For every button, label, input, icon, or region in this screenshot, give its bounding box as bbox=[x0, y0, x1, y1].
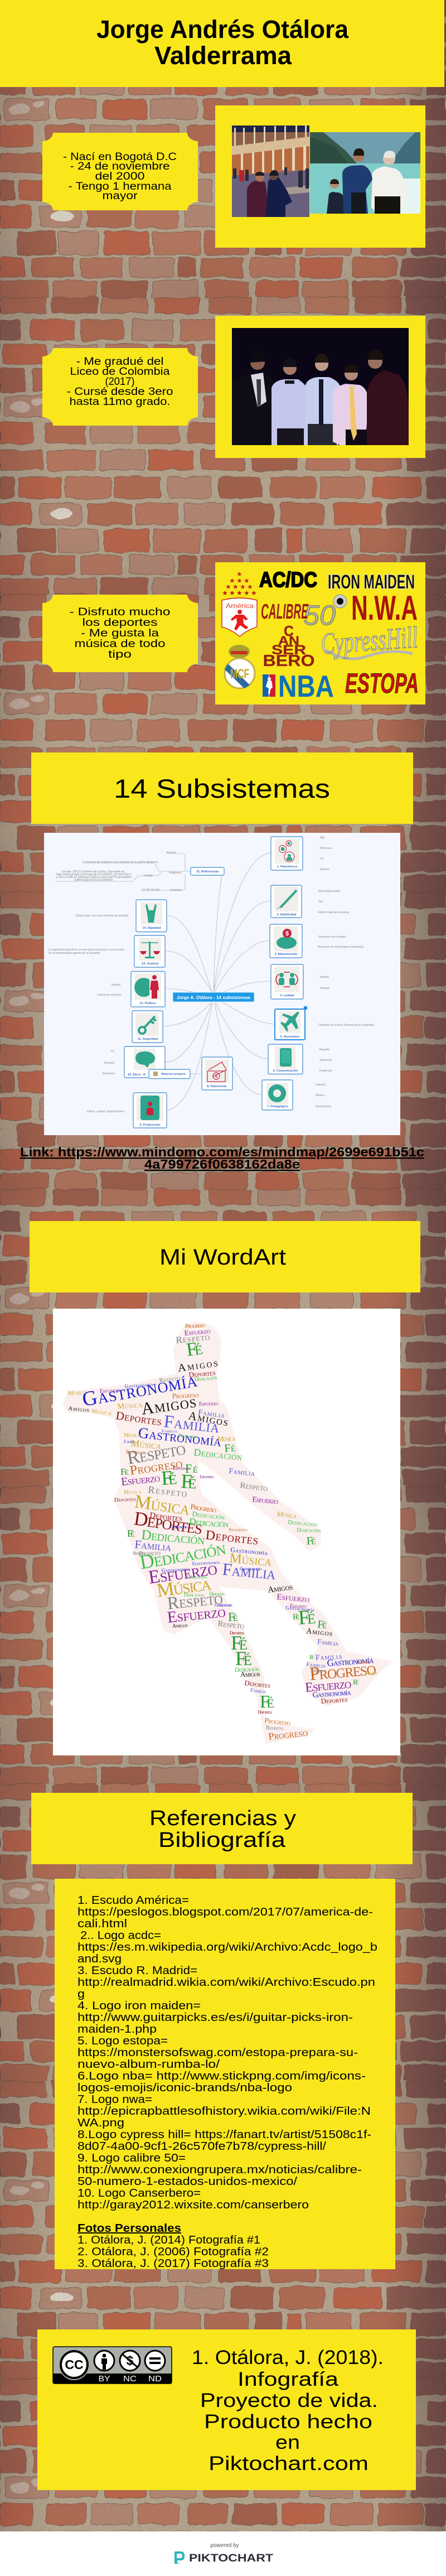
mind map leaf labels: Respeto bbox=[319, 1048, 330, 1051]
word art figure: Respeto bbox=[240, 1481, 268, 1493]
panel: references list: nuevo-album-rumba-lo/ bbox=[77, 2058, 220, 2071]
heading: 14 Subsistemas bbox=[31, 752, 413, 824]
mind map leaf labels bbox=[47, 836, 374, 1113]
word art figure: Gastronomía bbox=[170, 1525, 188, 1530]
icon: creative commons badge: ND bbox=[148, 2374, 162, 2384]
panel: references list: https://peslogos.blogspot.com/2017/07/america-de- bbox=[77, 1906, 373, 1918]
logo: América de Cali: ★ bbox=[236, 570, 243, 578]
panel: hobbies text bbox=[42, 595, 198, 672]
word art figure: Fé bbox=[120, 1467, 129, 1477]
panel: hobbies text: - Disfruto mucho bbox=[69, 606, 171, 618]
mind map leaf labels: Deporte bbox=[316, 1083, 326, 1087]
word art figure: Fé bbox=[224, 1441, 236, 1455]
icon: creative commons badge: CC bbox=[65, 2357, 84, 2372]
word art figure: Fé bbox=[235, 1647, 252, 1670]
node: 7 Pedagógico bbox=[262, 1080, 293, 1110]
word art figure: Música bbox=[229, 1551, 273, 1570]
panel: credits: Producto hecho bbox=[204, 2411, 372, 2433]
panel: references list bbox=[55, 1879, 395, 2270]
word art figure: Familia bbox=[221, 1559, 277, 1583]
word art figure: Dedicación bbox=[235, 1666, 259, 1673]
panel: school text bbox=[42, 348, 198, 426]
word art figure: Música bbox=[124, 1432, 140, 1439]
word art figure: Música bbox=[91, 1408, 112, 1417]
node: 8 Patrimonio: $ bbox=[215, 1074, 218, 1079]
panel: graduation photo bbox=[215, 316, 425, 458]
node: 14 Dignidad: 14. Dignidad bbox=[142, 927, 161, 930]
word art figure: Esfuerzo bbox=[166, 1603, 226, 1627]
node: 15 Referencias bbox=[191, 867, 224, 875]
mind map leaf labels: https://www.google.com/maps/@-34.6390281,-58.3633790,3 bbox=[56, 873, 132, 876]
mind map leaf labels: Google bbox=[144, 874, 153, 877]
mind map leaf labels: Tolerancia bbox=[319, 1059, 332, 1062]
logo: AC/DC: AC/DC bbox=[259, 568, 317, 592]
mind map link bbox=[20, 1145, 424, 1171]
panel: references list: and.svg bbox=[77, 1953, 122, 1965]
logo: Calibre 50: CALIBRE bbox=[261, 600, 309, 624]
word art figure: Esfuerzo bbox=[290, 1603, 307, 1609]
panel: school text: - Cursé desde 3ero bbox=[67, 386, 173, 398]
word art figure: Fé bbox=[228, 1610, 238, 1624]
word art figure: Música bbox=[133, 1491, 192, 1519]
word art figure: Fé bbox=[161, 1466, 177, 1489]
panel: references list: 5. Logo estopa= bbox=[77, 2035, 168, 2047]
word art figure: Familia bbox=[317, 1637, 339, 1647]
word art figure: Familia bbox=[306, 1661, 326, 1670]
word art figure: Gastronomía bbox=[80, 1368, 199, 1411]
word art figure: Progreso bbox=[268, 1727, 308, 1742]
node: 6 Comunicación bbox=[268, 1044, 303, 1074]
word art figure: Fé bbox=[353, 1678, 359, 1686]
node: 13 Justicia: 13. Justicia bbox=[142, 962, 159, 966]
mind map leaf labels: bv8BnIrQg!2e0!7i13312!8i6656 bbox=[74, 879, 113, 882]
icon: creative commons badge bbox=[53, 2347, 172, 2384]
word art figure: Progreso bbox=[264, 1716, 291, 1727]
word art figure: Fé bbox=[181, 1470, 197, 1493]
node: 2 Salubridad: 2. Salubridad bbox=[277, 913, 297, 916]
panel: references list: 3. Otálora, J. (2017) Fotografía #3 bbox=[77, 2257, 269, 2270]
panel: credits: en bbox=[275, 2432, 300, 2453]
word art figure: Esfuerzo bbox=[277, 1593, 310, 1604]
node: 2 Salubridad bbox=[271, 885, 302, 918]
word art figure: Deportes bbox=[115, 1408, 163, 1429]
panel: references list: 9. Logo calibre 50= bbox=[77, 2152, 186, 2164]
word art figure: Familia bbox=[134, 1537, 172, 1554]
footer: powered by Piktochart bbox=[174, 2542, 273, 2564]
footer: powered by Piktochart: PIKTOCHART bbox=[189, 2553, 273, 2564]
word art figure: Dedicación bbox=[178, 1432, 198, 1440]
panel: references list: WA.png bbox=[77, 2117, 124, 2129]
mind map leaf labels: La mayoría de imágenes son tomadas de la galería Mindomo. bbox=[82, 861, 159, 864]
panel: references list: Fotos Personales bbox=[77, 2222, 181, 2235]
logo: América de Cali: ★★★★★ bbox=[222, 589, 257, 597]
word art figure: Fé bbox=[317, 1618, 327, 1631]
mind map leaf labels: Neutral bbox=[112, 983, 120, 987]
word art figure: Deportes bbox=[230, 1630, 244, 1636]
node: 5 Recreativo: 5. Recreativo bbox=[280, 1035, 300, 1039]
word art figure: Deportes bbox=[258, 1710, 272, 1715]
word art figure: Dedicación bbox=[297, 1527, 321, 1534]
node: 1 Parentesco: 1. Parentesco bbox=[277, 865, 298, 869]
logo: América de Cali: ★★★ bbox=[229, 577, 250, 585]
word art figure: Familia bbox=[250, 1687, 266, 1695]
mind map link: 4a799726f0638162da8e bbox=[144, 1157, 300, 1171]
node: 3 Manutención: $ bbox=[285, 930, 289, 937]
node: 12 Político: 12. Político bbox=[139, 1002, 156, 1005]
logo: Real Madrid: MCF bbox=[230, 667, 249, 682]
panel: references list: 8d07-4a00-9cf1-26c570fe7b78/cypress-hill/ bbox=[77, 2140, 327, 2153]
node: Ahorros propios: Ahorros propios bbox=[161, 1073, 186, 1076]
mind map leaf labels: Gastronomía bbox=[316, 1105, 332, 1108]
logo: Real Madrid bbox=[225, 645, 255, 688]
word art figure: Dedicación bbox=[194, 1374, 217, 1383]
logo: Canserbero: AN bbox=[278, 634, 299, 648]
node: 4 Lealtad: 4. Lealtad bbox=[280, 994, 294, 997]
panel: references list: http://www.guitarpicks.es/es/i/guitar-picks-iron- bbox=[77, 2011, 353, 2024]
word art figure: Progreso bbox=[172, 1390, 200, 1400]
node: 8 Patrimonio bbox=[202, 1057, 232, 1090]
panel: credits: 1. Otálora, J. (2018). bbox=[192, 2347, 384, 2368]
mind map leaf labels: Sobrino bbox=[319, 868, 329, 871]
node: 14 Dignidad bbox=[136, 900, 167, 932]
node: 10 Ético: 10. Ético - R bbox=[128, 1072, 146, 1077]
panel: birth text bbox=[42, 133, 198, 210]
mind map leaf labels: de un determinado agente de la sociedad" bbox=[49, 952, 101, 955]
panel: references list: logos-emojis/iconic-brands/nba-logo bbox=[77, 2082, 292, 2094]
panel: references list: 7. Logo nwa= bbox=[77, 2093, 152, 2106]
mind map leaf labels: a,75y,131.68h,91.68t/data=!3m6!1e1!3m4!1sPY51qRuegBGs bbox=[56, 876, 132, 879]
logo: América de Cali: ★★★★ bbox=[225, 583, 253, 591]
word art figure: Familia bbox=[315, 1652, 343, 1662]
panel: references list: http://garay2012.wixsite.com/canserbero bbox=[77, 2199, 309, 2211]
word art figure: Dedicación bbox=[140, 1527, 205, 1548]
word art figure: Esfuerzo bbox=[100, 1387, 120, 1395]
word art figure: Esfuerzo bbox=[252, 1496, 279, 1506]
word art figure: Respeto bbox=[138, 1549, 161, 1558]
word art figure: Progreso bbox=[190, 1503, 217, 1515]
node: 5 Recreativo bbox=[275, 1006, 308, 1040]
panel: birth text: mayor bbox=[103, 190, 138, 202]
panel: credits: Proyecto de vida. bbox=[200, 2390, 378, 2411]
node: 12 Político bbox=[131, 972, 165, 1007]
word art figure: Esfuerzo bbox=[199, 1401, 219, 1407]
mind map leaf labels: Hermana bbox=[320, 847, 331, 850]
footer: powered by Piktochart: powered by bbox=[211, 2542, 239, 2549]
panel: references list: 2. Otálora, J. (2006) Fotografía #2 bbox=[77, 2246, 269, 2258]
node: 8 Patrimonio: 8. Patrimonio bbox=[207, 1085, 227, 1088]
heading: Referencias y Bibliografía bbox=[31, 1793, 413, 1864]
logo: América de Cali bbox=[222, 570, 257, 636]
mind map leaf labels: Tolerancia bbox=[102, 1072, 115, 1075]
panel: credits: Infografía bbox=[237, 2368, 339, 2390]
word art figure: Amigos bbox=[240, 1670, 260, 1678]
panel: references list: 3. Escudo R. Madrid= bbox=[77, 1965, 197, 1977]
panel: references list: 1. Otálora, J. (2014) Fotografía #1 bbox=[77, 2234, 260, 2246]
word art figure: Respeto bbox=[266, 1725, 283, 1732]
word art figure: Progreso bbox=[126, 1449, 146, 1455]
mind map leaf labels: "Quiero todo con unos mínimos de bondad" bbox=[75, 914, 129, 918]
word art figure: Gastronomía bbox=[215, 1603, 233, 1608]
mind map leaf labels: Caminito de la boca, Buenos Aires, Argentina bbox=[318, 1024, 374, 1027]
word art figure: Gastronomía bbox=[240, 1566, 263, 1571]
word art figure: Progreso bbox=[229, 1527, 248, 1532]
word art figure: Música bbox=[156, 1572, 212, 1601]
mind map leaf labels: Artículo bbox=[167, 851, 176, 855]
panel: hobbies text: música de todo bbox=[75, 638, 165, 650]
word art figure: Respeto bbox=[148, 1484, 187, 1499]
word art figure: Deportes bbox=[133, 1507, 204, 1538]
node: 4 Lealtad bbox=[271, 964, 303, 999]
logo: Canserbero bbox=[263, 623, 314, 670]
icon: piktochart logo bbox=[174, 2551, 185, 2564]
mind map leaf labels: Amigos bbox=[321, 987, 330, 990]
mind map leaf labels: Recursos de mi padre bbox=[319, 935, 346, 939]
word art figure: Amigos bbox=[140, 1391, 197, 1419]
word art figure: Amigos bbox=[172, 1623, 188, 1629]
word art figure: Música bbox=[117, 1401, 143, 1411]
panel: birth text: del 2000 bbox=[95, 171, 145, 182]
word art figure: Fé bbox=[231, 1632, 248, 1654]
icon: creative commons badge: $ bbox=[127, 2353, 134, 2368]
word art figure: Dedicación bbox=[193, 1446, 243, 1463]
word art figure: Gastronomía bbox=[162, 1566, 190, 1573]
panel: credits: Piktochart.com bbox=[209, 2453, 369, 2474]
word art figure: Familia bbox=[124, 1439, 137, 1444]
photo: lake family bbox=[310, 132, 420, 214]
word art figure: Amigos bbox=[68, 1405, 90, 1414]
panel: references list: http://realmadrid.wikia.com/wiki/Archivo:Escudo.pn bbox=[77, 1976, 375, 1989]
word art figure: Respeto bbox=[217, 1619, 245, 1631]
word art figure: Esfuerzo bbox=[173, 1465, 190, 1471]
photo: palace courtyard bbox=[232, 126, 309, 217]
word art figure: Gastronomía bbox=[230, 1546, 268, 1557]
heading: Mi WordArt bbox=[30, 1221, 420, 1292]
panel: school text: - Me gradué del bbox=[76, 356, 164, 368]
word art figure: Esfuerzo bbox=[120, 1472, 161, 1488]
mind map leaf labels: Google. (2012) Caminito de la boca. Disponible en: bbox=[62, 870, 125, 874]
word art figure: Amigos bbox=[268, 1583, 293, 1595]
title banner bbox=[0, 0, 444, 87]
panel: school text: Liceo de Colombia bbox=[70, 366, 170, 378]
node: Ahorros propios bbox=[149, 1069, 190, 1079]
word art figure: Dedicación bbox=[138, 1536, 227, 1574]
word art figure: Fé bbox=[185, 1461, 198, 1475]
logo: Calibre 50 bbox=[261, 595, 347, 631]
mind map connectors bbox=[56, 853, 275, 1110]
mind map leaf labels: Videos, mapas, organizadores bbox=[86, 1110, 124, 1113]
word art figure: Gastronomía bbox=[312, 1689, 352, 1700]
logo: NBA: NBA bbox=[278, 669, 334, 703]
node: 10 Ético bbox=[124, 1046, 165, 1078]
mind map leaf labels: Dieta balanceada bbox=[318, 890, 340, 893]
word art figure: Respeto bbox=[133, 1551, 146, 1556]
word art figure: Amigos bbox=[306, 1627, 333, 1638]
panel: school text: hasta 11mo grado. bbox=[69, 396, 171, 408]
word art figure: Familia bbox=[162, 1429, 178, 1434]
panel: references list: https://monstersofswag.com/estopa-prepara-su- bbox=[77, 2047, 358, 2059]
node: 6 Comunicación: 6. Comunicación bbox=[273, 1069, 298, 1073]
word art figure: Música bbox=[68, 1389, 86, 1397]
word art figure: Dedicación bbox=[192, 1509, 225, 1521]
word art figure: Fé bbox=[260, 1691, 274, 1711]
mind map leaf labels: Tío bbox=[319, 857, 324, 861]
icon: creative commons badge: BY bbox=[98, 2374, 110, 2384]
word art figure: Dedicación bbox=[187, 1574, 207, 1580]
node: 9 Producción bbox=[133, 1093, 167, 1128]
mind map leaf labels: Novela bbox=[320, 976, 329, 979]
panel: family photos bbox=[215, 105, 425, 248]
word art figure: Gastronomía bbox=[124, 1381, 154, 1389]
mind map leaf labels: Respeto bbox=[104, 1062, 115, 1065]
node: 7 Pedagógico: 7. Pedagógico bbox=[267, 1105, 289, 1108]
node: 13 Justicia bbox=[134, 935, 165, 967]
node: 11 Seguridad: 11. Seguridad bbox=[138, 1038, 158, 1041]
mind map leaf labels: VIH bbox=[318, 900, 323, 904]
mind map leaf labels: Liberal por el bosco bbox=[97, 993, 122, 997]
word art figure: Deportes bbox=[244, 1678, 271, 1690]
node: 3 Manutención: 3. Manutención bbox=[275, 953, 298, 956]
word art figure: Dedicación bbox=[209, 1591, 225, 1596]
mind map leaf labels: Recursos de mi hermano (ocasional) bbox=[318, 946, 363, 949]
heading: Referencias y Bibliografía: Bibliografía bbox=[158, 1829, 286, 1852]
word art figure: Deportes bbox=[114, 1497, 136, 1503]
word art figure: Fé bbox=[293, 1613, 299, 1622]
word art figure: Gastronomía bbox=[192, 1559, 221, 1566]
panel: references list: 2.. Logo acdc= bbox=[80, 1929, 161, 1942]
title banner: Valderrama bbox=[154, 41, 292, 70]
word art figure: Dedicación bbox=[189, 1516, 229, 1530]
node: 15 Referencias: 15. Referencias bbox=[196, 870, 219, 874]
word art figure: Respeto bbox=[166, 1588, 224, 1613]
panel: school text: (2017) bbox=[105, 376, 135, 388]
mind map bbox=[44, 833, 400, 1135]
mind map leaf labels: "La capacidad que tiene un ente para reaccionar a una acción bbox=[47, 948, 124, 952]
panel: hobbies text: - Me gusta la bbox=[81, 628, 159, 639]
word art figure: Dedicación bbox=[288, 1519, 318, 1528]
logo: Canserbero: C bbox=[284, 623, 294, 639]
panel: references list: 10. Logo Canserbero= bbox=[77, 2187, 201, 2199]
panel: credits bbox=[37, 2329, 416, 2490]
heading: Mi WordArt: Mi WordArt bbox=[159, 1245, 286, 1270]
panel: references list: http://epicrapbattlesofhistory.wikia.com/wiki/File:N bbox=[77, 2105, 371, 2117]
word art figure: Gastronomía bbox=[285, 1605, 315, 1613]
word art figure: Respeto bbox=[313, 1668, 326, 1673]
node: 1 Parentesco bbox=[271, 837, 303, 870]
mind map leaf labels: Fé bbox=[111, 1050, 114, 1053]
word art figure: Gastronomía bbox=[327, 1654, 374, 1668]
word art figure: Esfuerzo bbox=[184, 1326, 211, 1337]
word art figure: Gastronomía bbox=[137, 1424, 222, 1450]
panel: references list: 50-numero-1-estados-unidos-mexico/ bbox=[77, 2175, 298, 2188]
word art figure: Respeto bbox=[125, 1438, 187, 1469]
logo: Canserbero: BERO bbox=[263, 652, 314, 670]
word art figure: Progreso bbox=[185, 1322, 205, 1330]
title banner: Jorge Andrés Otálora bbox=[96, 15, 349, 44]
word art figure: Fé bbox=[298, 1605, 316, 1629]
word art figure: Esfuerzo bbox=[304, 1677, 352, 1695]
word art figure: Familia bbox=[198, 1408, 226, 1420]
panel: references list: 6.Logo nba= http://www.stickpng.com/img/icons- bbox=[77, 2070, 366, 2082]
word art figure: Dedicación bbox=[184, 1592, 205, 1598]
central node bbox=[173, 992, 254, 1002]
heading: Referencias y Bibliografía: Referencias y bbox=[149, 1807, 296, 1830]
panel: birth text: - Nací en Bogotá D.C bbox=[63, 151, 177, 163]
word art figure: Progreso bbox=[308, 1658, 377, 1685]
node: 3 Manutención bbox=[270, 924, 302, 958]
node: 11 Seguridad bbox=[132, 1011, 163, 1043]
panel: references list: 8.Logo cypress hill= https://fanart.tv/artist/51508c1f- bbox=[77, 2129, 371, 2141]
word art figure: Familia bbox=[229, 1467, 256, 1478]
word art figure: Respeto bbox=[175, 1332, 210, 1345]
mind map leaf labels: Prudencia bbox=[319, 1069, 332, 1073]
mind map leaf labels: Música bbox=[316, 1094, 324, 1097]
panel: logos bbox=[215, 562, 425, 705]
mind map leaf labels: Imágenes bbox=[169, 871, 181, 875]
mind map link: Link: https://www.mindomo.com/es/mindmap/2699e691b51c bbox=[20, 1145, 424, 1159]
mind map leaf labels: Fútbol todas las semanas bbox=[318, 911, 350, 914]
word art figure: Deportes bbox=[321, 1695, 348, 1705]
word art figure: Deportes bbox=[188, 1368, 216, 1379]
panel: references list: https://es.m.wikipedia.org/wiki/Archivo:Acdc_logo_b bbox=[77, 1941, 377, 1953]
panel: references list: cali.html bbox=[77, 1918, 127, 1930]
mind map leaf labels: Hija bbox=[320, 836, 325, 840]
word art figure: Música bbox=[277, 1509, 298, 1520]
word art figure: Música bbox=[130, 1437, 162, 1451]
panel: hobbies text: tipo bbox=[108, 649, 132, 660]
word art figure: Fé bbox=[127, 1528, 135, 1539]
word art figure: Deportes bbox=[205, 1528, 259, 1548]
logo: América de Cali: América bbox=[226, 602, 254, 610]
mind map leaf labels: CC BY NC ND bbox=[142, 889, 160, 892]
logo: Calibre 50: 50 bbox=[303, 600, 336, 631]
panel: references list: 1. Escudo América= bbox=[77, 1894, 189, 1907]
word art figure: Progreso bbox=[129, 1456, 183, 1478]
word art figure: Esfuerzo bbox=[200, 1474, 215, 1479]
panel: references list: 4. Logo iron maiden= bbox=[77, 2000, 201, 2012]
central node: Jorge A. Otálora - 14 subsistemas bbox=[177, 995, 250, 1000]
panel: hobbies text: los deportes bbox=[83, 617, 157, 629]
word art figure: Amigos bbox=[187, 1408, 229, 1429]
word art figure: Música bbox=[217, 1434, 236, 1443]
word art figure: Música bbox=[365, 1671, 378, 1676]
word art figure: Música bbox=[124, 1489, 142, 1496]
word art figure: Deportes bbox=[149, 1511, 183, 1523]
word art figure: Familia bbox=[163, 1411, 221, 1436]
word art figure: Respeto bbox=[159, 1375, 181, 1384]
icon: creative commons badge: NC bbox=[123, 2374, 137, 2384]
mind map leaf labels: Licencias bbox=[170, 889, 182, 892]
word art figure: Progreso bbox=[357, 1660, 372, 1665]
word art figure: Fé bbox=[185, 1338, 204, 1361]
panel: birth text: - 24 de noviembre bbox=[70, 161, 169, 172]
logo: NBA bbox=[263, 669, 334, 703]
panel: references list: maiden-1.php bbox=[77, 2023, 157, 2035]
logo: Canserbero: SER bbox=[272, 643, 306, 658]
panel: birth text: - Tengo 1 hermana bbox=[68, 181, 172, 192]
panel: references list: http://www.conexiongrupera.mx/noticias/calibre- bbox=[77, 2164, 362, 2176]
panel: references list: g bbox=[77, 1988, 85, 2000]
node: 9 Producción: 9. Producción bbox=[139, 1123, 161, 1127]
word art figure: Fé bbox=[306, 1535, 316, 1547]
word art figure bbox=[53, 1309, 400, 1755]
word art figure: Esfuerzo bbox=[147, 1558, 219, 1588]
word art figure: Amigos bbox=[177, 1357, 219, 1374]
heading: 14 Subsistemas: 14 Subsistemas bbox=[114, 774, 330, 803]
word art figure: Fé bbox=[309, 1654, 314, 1661]
